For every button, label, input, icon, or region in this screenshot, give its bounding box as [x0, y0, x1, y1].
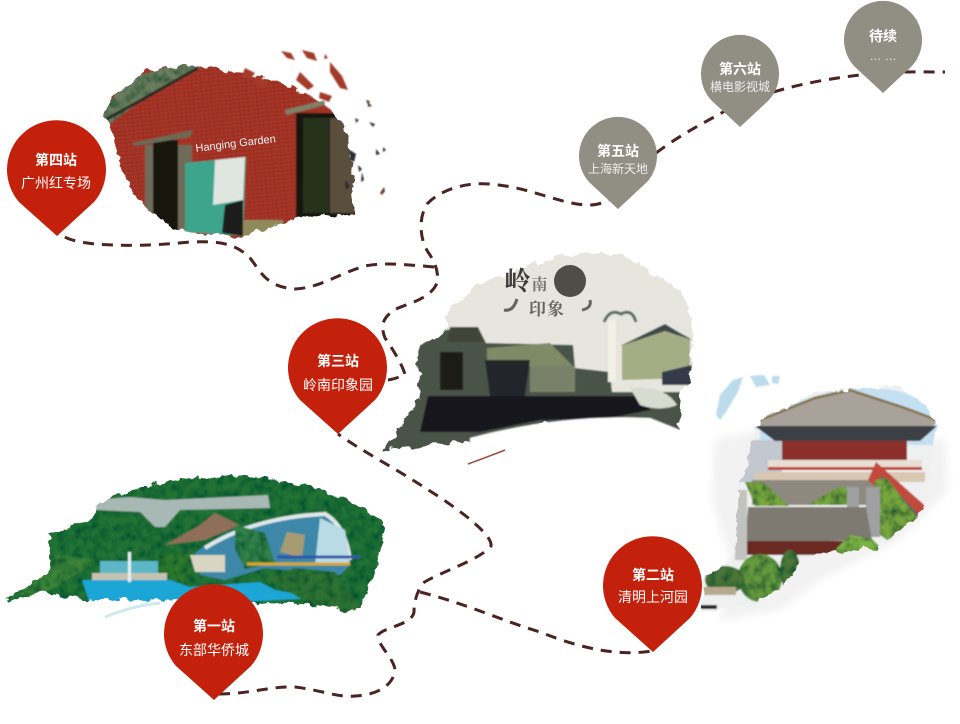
pin: stop 6: 横电影视城 — [710, 79, 770, 94]
pin: stop 2: 清明上河园 — [618, 589, 688, 605]
pin: stop 1: 第一站 — [193, 618, 235, 634]
sign text: Hanging Garden — [195, 133, 276, 155]
pin: stop 4 — [7, 120, 106, 236]
ink sun — [554, 265, 586, 297]
dashed route: fifth stop to continuing — [656, 72, 945, 153]
pin: stop 5 — [579, 117, 657, 209]
pin: to be continued: … … — [869, 49, 897, 63]
pin: to be continued — [844, 1, 922, 93]
pin: stop 3: 第三站 — [317, 353, 359, 369]
pin: stop 6: 第六站 — [719, 61, 761, 77]
pin: stop 2: 第二站 — [632, 567, 674, 583]
pin: stop 3: 岭南印象园 — [303, 377, 373, 393]
photo: red brick building — [95, 50, 386, 240]
pin: stop 3 — [288, 318, 387, 434]
pin: stop 2 — [603, 536, 702, 652]
dashed route: first stop to second and third stops — [60, 72, 945, 696]
pin: stop 1 — [164, 584, 263, 700]
photo: Qingming temple — [695, 375, 950, 620]
dashed route: third stop up to fifth stop — [383, 184, 612, 380]
pin: stop 4: 广州红专场 — [21, 175, 91, 191]
pin: stop 6 — [701, 35, 779, 127]
photo: Lingnan ink painting — [380, 250, 700, 464]
brick flakes — [242, 50, 386, 195]
calligraphy title: 印象 — [529, 295, 565, 320]
photo: OCT East resort — [0, 470, 390, 617]
pin: stop 1: 东部华侨城 — [179, 642, 249, 658]
calligraphy title: 岭南 — [504, 261, 548, 298]
pale watercolor wash — [712, 375, 948, 620]
pin: stop 5: 第五站 — [597, 143, 639, 159]
pin: to be continued: 待续 — [869, 28, 897, 44]
pin: stop 4: 第四站 — [35, 152, 77, 168]
pin: stop 5: 上海新天地 — [588, 161, 648, 176]
dashed route: junction to fourth stop — [60, 234, 434, 289]
calligraphy title — [504, 261, 590, 320]
